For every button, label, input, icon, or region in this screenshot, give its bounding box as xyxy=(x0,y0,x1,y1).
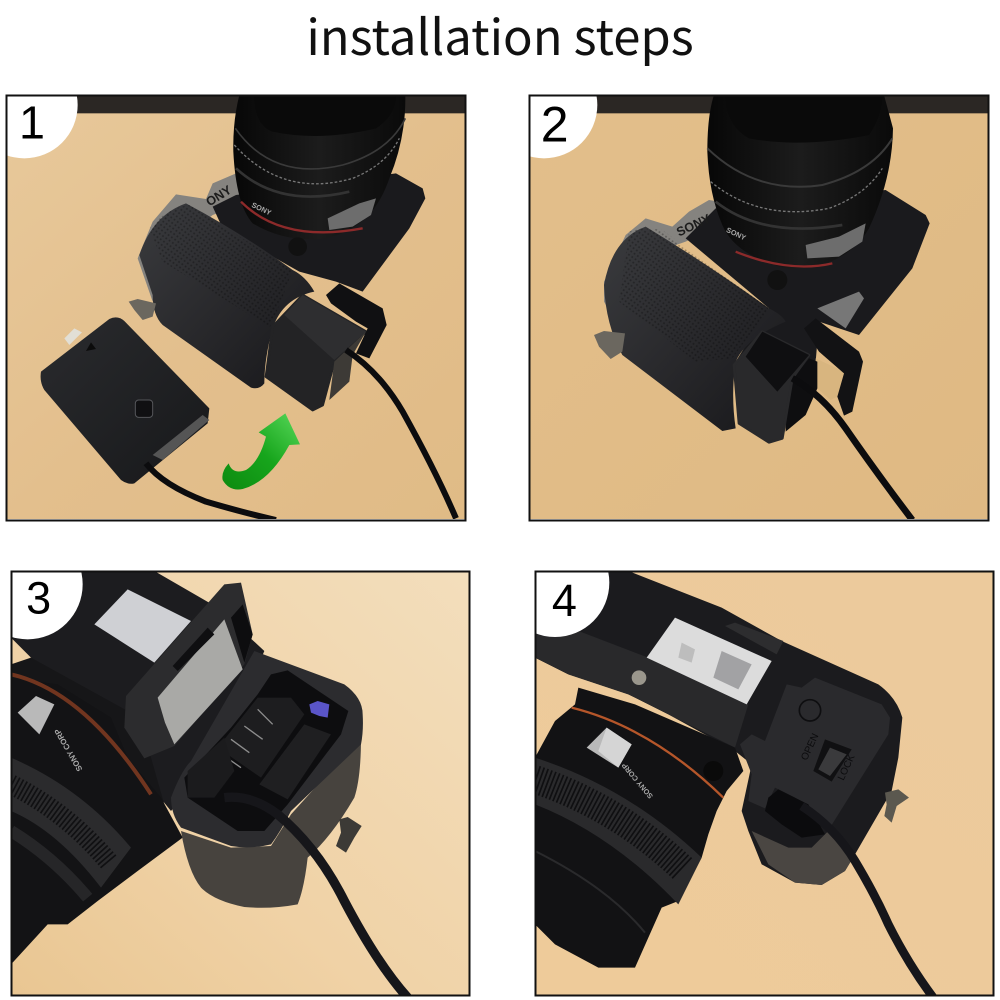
lens: SONY xyxy=(725,225,748,242)
grip side xyxy=(752,831,855,885)
step number badge xyxy=(0,529,83,639)
scratched plate xyxy=(535,614,748,748)
inserted adapter xyxy=(266,295,366,410)
tripod screw xyxy=(594,331,625,359)
lens xyxy=(535,688,743,968)
grip side xyxy=(181,738,361,908)
door opening gap xyxy=(816,358,844,400)
lens xyxy=(233,95,405,256)
step number badge: 3 xyxy=(26,572,51,623)
lens: SONY CORP xyxy=(620,761,655,800)
label sticker xyxy=(94,589,191,663)
cable xyxy=(792,378,912,520)
battery door xyxy=(326,283,387,358)
panel: step 2 photo xyxy=(528,94,990,522)
purple latch xyxy=(309,701,329,718)
battery cable xyxy=(146,463,276,520)
camera body xyxy=(213,173,425,292)
cable xyxy=(224,797,408,998)
panel: step 4 photo xyxy=(501,528,994,998)
panel: step 1 photo xyxy=(0,52,466,520)
battery door: LOCK xyxy=(836,753,858,782)
lens xyxy=(707,95,893,290)
camera grip xyxy=(139,203,314,388)
battery door xyxy=(740,678,890,825)
cable xyxy=(346,350,456,518)
icon: green arrow xyxy=(222,413,300,489)
dummy battery xyxy=(41,317,209,484)
white battery nub xyxy=(64,328,82,345)
step number badge: 2 xyxy=(541,97,569,153)
body label xyxy=(817,292,864,328)
SONY logo: SONY xyxy=(674,211,713,239)
step number badge: 4 xyxy=(552,575,577,626)
camera body xyxy=(535,571,902,885)
step number badge xyxy=(501,528,609,637)
compartment rim xyxy=(171,651,363,847)
step number badge xyxy=(8,96,78,158)
inserted adapter xyxy=(734,332,809,442)
camera body xyxy=(686,190,930,388)
lens: SONY xyxy=(250,200,273,217)
tripod screw xyxy=(129,299,156,320)
tripod socket xyxy=(632,670,646,685)
step number badge: 1 xyxy=(19,96,45,148)
cable xyxy=(802,806,933,998)
open battery door xyxy=(124,583,253,758)
camera top plate xyxy=(11,571,264,811)
connector opening xyxy=(765,789,825,838)
step number badge xyxy=(530,96,598,158)
lens xyxy=(11,674,183,964)
label sticker xyxy=(647,618,772,704)
silver top plate xyxy=(604,200,716,305)
compartment xyxy=(786,358,817,432)
battery door: OPEN xyxy=(799,732,821,762)
top latch xyxy=(725,623,783,654)
tripod screw xyxy=(336,817,362,853)
SONY logo: ONY xyxy=(204,183,235,209)
title: installation steps xyxy=(306,0,694,70)
camera grip xyxy=(604,227,786,431)
battery door xyxy=(804,318,863,416)
battery compartment xyxy=(184,670,348,831)
silver top plate xyxy=(138,173,241,302)
lens: SONY CORP xyxy=(52,726,84,773)
panel: step 3 photo xyxy=(10,570,470,996)
tripod screw xyxy=(884,789,909,823)
shadow behind lens xyxy=(11,658,164,804)
